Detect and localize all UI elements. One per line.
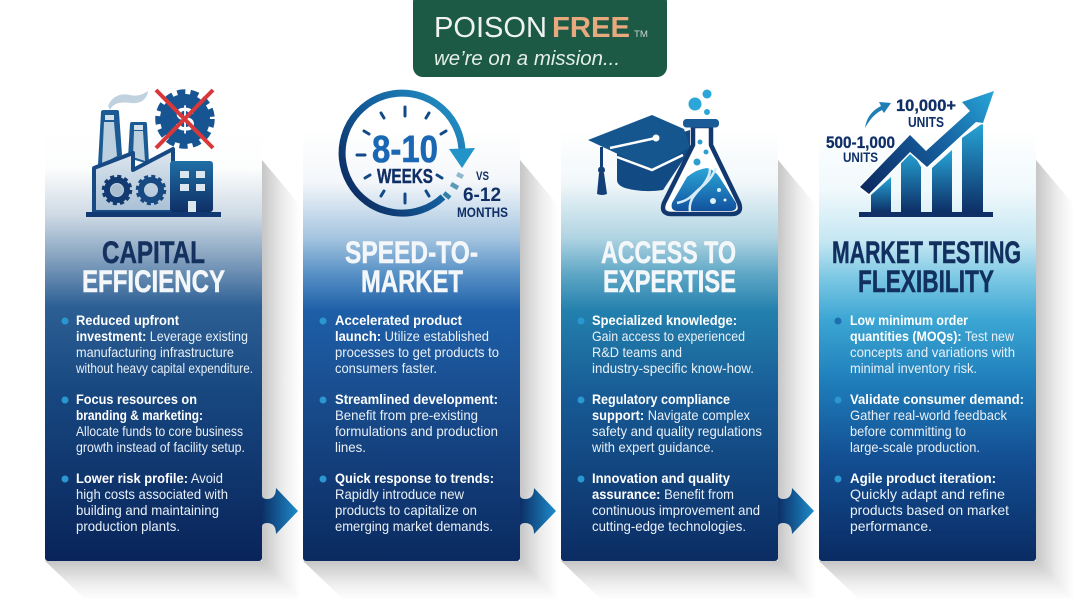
- bullet: focus on branding: Focus resources on: [76, 392, 197, 407]
- bullet: quick response: products to capitalize on: [335, 503, 477, 518]
- icon: growth chart: UNITS: [843, 150, 878, 165]
- bullet: reduced upfront investment: without heavy capital expenditure.: [75, 361, 253, 376]
- brand wordmark: FREE: [552, 12, 630, 44]
- bullet: lower risk profile: high costs associated with: [76, 487, 228, 502]
- heading: [832, 234, 1021, 299]
- bullet: validate demand: [834, 392, 1024, 455]
- bullet: innovation and quality: cutting-edge technologies.: [592, 519, 746, 534]
- icon: clock 8-10 weeks vs 6-12 months: WEEKS: [377, 166, 433, 188]
- bullet: quick response: emerging market demands.: [335, 519, 493, 534]
- icon: growth chart: UNITS: [908, 115, 944, 131]
- icon: growth chart: 500-1,000: [826, 133, 895, 152]
- bullet: regulatory compliance: Regulatory compliance: [592, 392, 730, 407]
- heading: FLEXIBILITY: [858, 263, 994, 299]
- bullet: validate demand: Validate consumer demand:: [850, 392, 1024, 407]
- bullet: lower risk profile: [62, 471, 228, 534]
- heading: [82, 234, 225, 299]
- bullet: focus on branding: Allocate funds to core business: [76, 424, 243, 439]
- bullet: low MOQs: [834, 313, 1015, 376]
- brand wordmark: POISON: [434, 12, 547, 44]
- bullet: reduced upfront investment: [62, 313, 253, 376]
- heading: EFFICIENCY: [82, 263, 225, 299]
- panel: market testing flexibility: [819, 91, 1074, 600]
- panel shadow: [819, 160, 1074, 600]
- bullet list: [320, 313, 499, 534]
- bullet: specialized knowledge: R&D teams and: [592, 345, 682, 360]
- panel shadow: [45, 160, 300, 600]
- icon: clock 8-10 weeks vs 6-12 months: VS: [476, 169, 489, 183]
- bullet: validate demand: before committing to: [850, 424, 966, 439]
- arrow: speed to expertise: [520, 488, 556, 534]
- heading: [345, 234, 478, 299]
- bullet: streamlined development: Benefit from pre-existing: [335, 408, 478, 423]
- bullet: streamlined development: [320, 392, 498, 455]
- panel shadow: [561, 160, 816, 600]
- bullet: agile iteration: Agile product iteration:: [850, 471, 996, 486]
- panel: speed to market: [303, 93, 558, 600]
- icon: factory with crossed-out gear: [86, 90, 221, 217]
- bullet: agile iteration: products based on market: [850, 503, 1009, 518]
- bullet: quick response: [320, 471, 494, 534]
- bullet: agile iteration: performance.: [850, 519, 932, 534]
- heading: MARKET: [361, 263, 463, 299]
- bullet: quick response: Rapidly introduce new: [335, 487, 464, 502]
- bullet: innovation and quality: [578, 471, 760, 534]
- icon: clock 8-10 weeks vs 6-12 months: 8-10: [372, 129, 438, 171]
- icon: clock 8-10 weeks vs 6-12 months: [342, 93, 508, 220]
- bullet: lower risk profile: production plants.: [76, 519, 180, 534]
- bullet: accelerated launch: processes to get products to: [335, 345, 499, 360]
- icon: growth chart: [826, 91, 994, 217]
- bullet: regulatory compliance: safety and quality regulations: [592, 424, 762, 439]
- bullet: low MOQs: concepts and variations with: [850, 345, 1015, 360]
- heading: EXPERTISE: [603, 263, 736, 299]
- heading: [601, 234, 736, 299]
- arrow: expertise to market testing: [778, 488, 814, 534]
- icon: clock 8-10 weeks vs 6-12 months: 6-12: [463, 185, 501, 206]
- bullet: streamlined development: formulations and production: [335, 424, 498, 439]
- bullet: reduced upfront investment: Reduced upfront: [76, 313, 179, 328]
- panel shadow: [303, 160, 558, 600]
- icon: growth chart: 10,000+: [896, 96, 956, 115]
- bullet list: [578, 313, 762, 534]
- bullet: focus on branding: branding & marketing:: [76, 408, 203, 423]
- bullet: validate demand: Gather real-world feedback: [850, 408, 1007, 423]
- bullet: agile iteration: [834, 471, 1009, 534]
- bullet: accelerated launch: launch: Utilize established: [335, 329, 489, 344]
- bullet: regulatory compliance: support: Navigate complex: [592, 408, 750, 423]
- brand wordmark: TM: [634, 29, 648, 40]
- bullet: validate demand: large-scale production.: [850, 440, 980, 455]
- icon: graduation cap and flask: [588, 90, 740, 214]
- bullet: regulatory compliance: with expert guidance.: [591, 440, 714, 455]
- bullet: streamlined development: lines.: [335, 440, 366, 455]
- bullet: specialized knowledge: industry-specific know-how.: [592, 361, 754, 376]
- icon: clock 8-10 weeks vs 6-12 months: MONTHS: [457, 205, 508, 220]
- bullet: specialized knowledge: Gain access to experienced: [592, 329, 745, 344]
- bullet: specialized knowledge: [578, 313, 754, 376]
- tagline: we’re on a mission...: [434, 48, 620, 70]
- bullet: innovation and quality: continuous improvement and: [592, 503, 760, 518]
- bullet: specialized knowledge: Specialized knowledge:: [592, 313, 737, 328]
- icon: factory with crossed-out gear: $: [176, 101, 195, 139]
- bullet: accelerated launch: [320, 313, 499, 376]
- bullet: lower risk profile: Lower risk profile: Avoid: [76, 471, 223, 486]
- heading: SPEED-TO-: [345, 234, 478, 270]
- brand wordmark: [434, 12, 648, 44]
- bullet: quick response: Quick response to trends:: [335, 471, 494, 486]
- panel: access to expertise: [561, 90, 816, 600]
- bullet: low MOQs: minimal inventory risk.: [850, 361, 977, 376]
- bullet list: [62, 313, 253, 534]
- bullet: low MOQs: quantities (MOQs): Test new: [850, 329, 1014, 344]
- bullet: agile iteration: Quickly adapt and refine: [850, 487, 1005, 502]
- bullet: accelerated launch: consumers faster.: [335, 361, 437, 376]
- heading: CAPITAL: [102, 234, 205, 270]
- arrow: capital to speed: [262, 488, 298, 534]
- panel: capital efficiency: [45, 90, 300, 600]
- bullet: innovation and quality: Innovation and quality: [592, 471, 730, 486]
- header badge: [413, 0, 667, 77]
- bullet: streamlined development: Streamlined development:: [335, 392, 498, 407]
- heading: ACCESS TO: [601, 234, 736, 270]
- bullet: reduced upfront investment: manufacturing infrastructure: [76, 345, 234, 360]
- bullet: focus on branding: growth instead of facility setup.: [76, 440, 245, 455]
- bullet: innovation and quality: assurance: Benefit from: [592, 487, 734, 502]
- bullet: regulatory compliance: [578, 392, 762, 455]
- bullet: focus on branding: [62, 392, 245, 455]
- bullet: accelerated launch: Accelerated product: [335, 313, 462, 328]
- bullet list: [834, 313, 1024, 534]
- bullet: reduced upfront investment: investment: Leverage existing: [76, 329, 248, 344]
- bullet: low MOQs: Low minimum order: [850, 313, 969, 328]
- bullet: lower risk profile: building and maintaining: [76, 503, 219, 518]
